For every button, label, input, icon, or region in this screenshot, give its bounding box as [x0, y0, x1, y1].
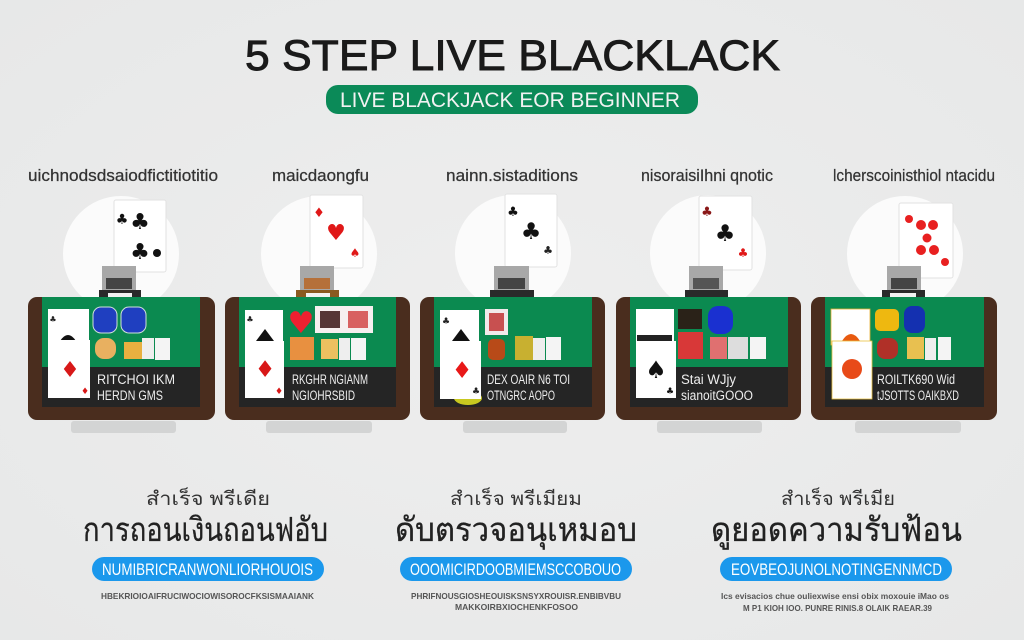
- step 5 table panel: tJSOTTS OAIKBXD: [877, 388, 959, 403]
- step 5 table panel: ROILTK690 Wid: [877, 372, 955, 387]
- block 3 fine print: Ics evisacios chue ouliexwise ensi obix moxouie iMao os: [721, 591, 949, 601]
- step 4 table panel: [616, 297, 801, 420]
- step 3 dealer box: [490, 266, 534, 297]
- step 1 table panel: RITCHOI IKM: [97, 372, 175, 387]
- step 4 table panel: sianoitGOOO: [681, 388, 753, 403]
- step 3 floating card: ♣: [521, 219, 541, 245]
- step 1 dealer box: [99, 266, 141, 297]
- step 2 floating card: ♠: [350, 246, 360, 260]
- step 2 table panel: ♣: [246, 315, 254, 324]
- block 2 fine print: MAKKOIRBXIOCHENKFOSOO: [455, 602, 578, 612]
- title: 5 STEP LIVE BLACKLACK: [245, 32, 780, 80]
- step 2 label: maicdaongfu: [272, 166, 369, 185]
- block 2 small heading: สำเร็จ พรีเมียม: [450, 486, 582, 510]
- bottom block 2: [395, 486, 637, 612]
- block 2 large heading: ดับตรวจอนุเหมอบ: [395, 511, 637, 550]
- step 1 table panel: ♦: [81, 387, 89, 397]
- step 1 floating card: ♣: [116, 212, 128, 228]
- step 5 dealer box: [882, 266, 925, 297]
- step 2 white circle: [261, 196, 377, 312]
- step 3 table panel: ♣: [442, 317, 450, 327]
- step 4 table panel: ♠: [645, 356, 667, 384]
- step 3 table panel: ♦: [452, 358, 472, 384]
- step 4 label: nisoraisiIhni qnotic: [641, 166, 773, 185]
- step 4 table panel: ♣: [666, 387, 674, 397]
- step column 4: [616, 166, 801, 433]
- step 2 table panel: RKGHR NGIANM: [292, 372, 368, 387]
- block 2 fine print: PHRIFNOUSGIOSHEOUISKSNSYXROUISR.ENBIBVBU: [411, 591, 621, 601]
- block 3 small heading: สำเร็จ พรีเมีย: [781, 486, 895, 510]
- block 3 fine print: M P1 KIOH IOO. PUNRE RINIS.8 OLAIK RAEAR.39: [743, 603, 932, 613]
- step 3 table panel: ♣: [472, 387, 480, 397]
- step 5 floating card: [899, 203, 953, 278]
- step 1 floating card: ♣: [130, 210, 150, 235]
- block 2 fine print: [411, 591, 621, 612]
- step column 3: [420, 166, 605, 433]
- step 3 floating card: ♣: [507, 205, 519, 220]
- step 4 floating card: ♣: [701, 205, 713, 220]
- step column 2: [225, 166, 410, 433]
- step 1 floating card: ♣: [130, 240, 150, 265]
- step 3 floating card: [505, 194, 557, 267]
- step 1 table panel: [28, 297, 215, 420]
- step 3 table panel: DEX OAIR N6 TOI: [487, 372, 570, 387]
- block 1 blue pill: NUMIBRICRANWONLIORHOUOIS: [102, 561, 313, 579]
- step 2 table panel: NGIOHRSBID: [292, 388, 355, 403]
- step 2 floating card: ♥: [326, 221, 346, 246]
- step 4 floating card: ♣: [715, 221, 735, 247]
- bottom block 1: [83, 486, 328, 601]
- block 3 blue pill: [720, 557, 952, 581]
- block 3 large heading: ดูยอดความรับฟ้อน: [711, 511, 962, 550]
- bottom block 3: [711, 486, 962, 613]
- step 3 white circle: [455, 195, 571, 311]
- step 1 label: uichnodsdsaiodfictitiotitio: [28, 166, 218, 185]
- step 4 table shadow: [657, 421, 762, 433]
- step 5 label: lcherscoinisthiol ntacidu: [833, 166, 995, 185]
- step 3 table shadow: [463, 421, 567, 433]
- step 2 table panel: ♥: [288, 306, 314, 341]
- step 1 table shadow: [71, 421, 176, 433]
- step column 5: [811, 166, 997, 433]
- step 5 white circle: [847, 196, 963, 312]
- step 2 table panel: ♦: [275, 387, 283, 397]
- block 2 blue pill: OOOMICIRDOOBMIEMSCCOBOUO: [410, 561, 621, 579]
- step 2 floating card: [310, 195, 363, 268]
- step 2 floating card: ♦: [313, 206, 325, 221]
- step 2 dealer box: [296, 266, 339, 297]
- step 2 table panel: ♦: [255, 357, 275, 383]
- block 3 blue pill: EOVBEOJUNOLNOTINGENNMCD: [731, 561, 942, 579]
- block 1 large heading: การถอนเงินถอนฟอับ: [83, 511, 328, 548]
- step 3 floating card: ♣: [543, 244, 553, 257]
- step 5 table shadow: [855, 421, 961, 433]
- step 1 table panel: ♣: [49, 315, 57, 324]
- step 1 table panel: ♦: [60, 358, 80, 383]
- step 3 label: nainn.sistaditions: [446, 166, 578, 185]
- step 3 table panel: [420, 297, 605, 420]
- step 3 table panel: OTNGRC AOPO: [487, 388, 555, 403]
- subtitle pill: LIVE BLACKJACK EOR BEGINNER: [340, 89, 680, 112]
- step 1 table panel: HERDN GMS: [97, 388, 163, 403]
- block 1 small heading: สำเร็จ พรีเดีย: [146, 486, 270, 510]
- block 1 blue pill: [92, 557, 324, 581]
- step 4 floating card: ♣: [738, 246, 748, 260]
- block 1 fine print: HBEKRIOIOAIFRUCIWOCIOWISOROCFKSISMAAIANK: [101, 591, 315, 601]
- step 4 white circle: [650, 195, 766, 311]
- step column 1: [28, 166, 218, 433]
- step 5 table panel: [811, 297, 997, 420]
- step 1 floating card: [114, 200, 166, 272]
- step 1 white circle: [63, 196, 179, 312]
- step 4 floating card: [699, 196, 752, 270]
- step 2 table panel: [225, 297, 410, 420]
- step 4 table panel: Stai WJjy: [681, 372, 736, 387]
- step 2 table shadow: [266, 421, 372, 433]
- block 2 blue pill: [400, 557, 632, 581]
- block 3 fine print: [721, 591, 949, 613]
- step 4 dealer box: [685, 266, 728, 297]
